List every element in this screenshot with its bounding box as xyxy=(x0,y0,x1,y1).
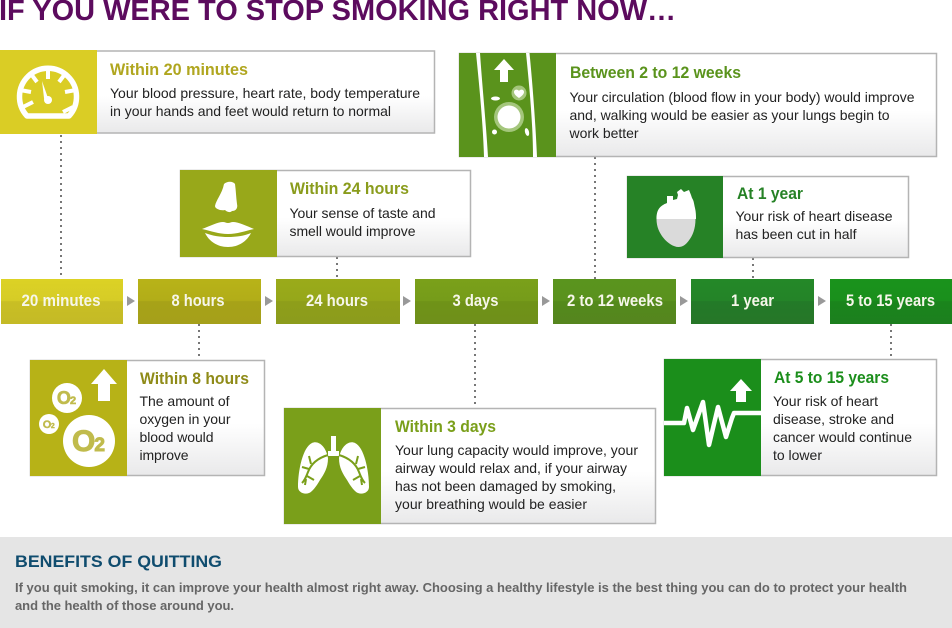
body text: has been cut in half xyxy=(736,226,857,242)
arrow xyxy=(403,296,411,306)
stage: 3 days xyxy=(415,279,538,324)
panel: within 8 hours xyxy=(30,360,264,476)
arrow xyxy=(542,296,550,306)
icon: gauge xyxy=(20,68,76,116)
body text: airway would relax and, if your airway xyxy=(395,460,627,476)
stage: 24 hours: 24 hours xyxy=(306,292,368,310)
stage: 5 to 15 years: 5 to 15 years xyxy=(846,292,935,310)
arrow xyxy=(680,296,688,306)
icon: blood vessel xyxy=(476,53,537,157)
body text: blood would xyxy=(140,429,214,445)
stage: 20 minutes: 20 minutes xyxy=(22,292,100,310)
connector: 20 minutes xyxy=(60,135,62,279)
stage: 20 minutes xyxy=(1,279,123,324)
body text: to lower xyxy=(773,447,822,463)
body text: Your blood pressure, heart rate, body temperature xyxy=(110,85,420,101)
panel: at 1 year xyxy=(627,176,908,258)
icon: oxygen: O2 xyxy=(57,388,76,408)
heading: Within 8 hours xyxy=(140,369,249,388)
body text: disease, stroke and xyxy=(773,411,894,427)
icon: oxygen: O2 xyxy=(72,425,104,458)
body text: Your lung capacity would improve, your xyxy=(395,442,638,458)
body text: smell would improve xyxy=(290,223,416,239)
panel: between 2 to 12 weeks xyxy=(459,53,936,157)
body text: and, walking would be easier as your lungs begin to xyxy=(570,107,890,123)
body text: improve xyxy=(140,447,189,463)
arrow xyxy=(818,296,826,306)
panel: within 24 hours xyxy=(180,170,470,257)
body text: has not been damaged by smoking, xyxy=(395,478,616,494)
timeline: stages xyxy=(1,279,952,324)
body text: Your sense of taste and xyxy=(290,205,436,221)
heading: Within 3 days xyxy=(395,417,496,436)
stage: 1 year: 1 year xyxy=(731,292,775,310)
connector: 1 year xyxy=(752,258,754,279)
icon: oxygen: O2 xyxy=(43,419,55,431)
arrow xyxy=(127,296,135,306)
body text: work better xyxy=(568,125,639,141)
connector: 5 to 15 years xyxy=(890,324,892,359)
stage: 3 days: 3 days xyxy=(452,292,498,310)
icon: nose and lips xyxy=(202,182,254,247)
icon: heartbeat xyxy=(664,379,761,445)
connector: 3 days xyxy=(474,324,476,408)
connector: 8 hours xyxy=(198,324,200,360)
heading: Within 24 hours xyxy=(290,179,409,198)
body text: The amount of xyxy=(140,393,230,409)
body text: oxygen in your xyxy=(140,411,231,427)
body text: Your circulation (blood flow in your body) would improve xyxy=(570,89,915,105)
stage: 1 year xyxy=(691,279,814,324)
heading: Between 2 to 12 weeks xyxy=(570,63,741,82)
body text: your breathing would be easier xyxy=(395,496,587,512)
body text: Your risk of heart disease xyxy=(736,208,893,224)
panel: at 5 to 15 years xyxy=(664,359,936,476)
connector: 24 hours xyxy=(336,257,338,279)
body text: cancer would continue xyxy=(773,429,912,445)
stage: 2 to 12 weeks: 2 to 12 weeks xyxy=(567,292,663,310)
panel: benefits of quitting xyxy=(0,537,952,628)
stage: 5 to 15 years xyxy=(830,279,952,324)
heading: BENEFITS OF QUITTING xyxy=(15,552,222,571)
stage: 24 hours xyxy=(276,279,400,324)
icon: lungs xyxy=(298,436,369,494)
stage: 8 hours: 8 hours xyxy=(172,292,224,310)
panel: within 3 days xyxy=(284,408,656,524)
body text: Your risk of heart xyxy=(773,393,878,409)
stage: 8 hours xyxy=(138,279,261,324)
heading: At 1 year xyxy=(737,184,803,203)
arrow xyxy=(265,296,273,306)
heading: Within 20 minutes xyxy=(110,60,248,79)
heading: At 5 to 15 years xyxy=(774,368,889,387)
stage: 2 to 12 weeks xyxy=(553,279,676,324)
connector: 2 to 12 weeks xyxy=(594,157,596,279)
body text: in your hands and feet would return to normal xyxy=(110,103,391,119)
body text: and the health of those around you. xyxy=(15,598,234,613)
icon: heart xyxy=(656,189,696,247)
icon: oxygen xyxy=(39,369,117,467)
panel: within 20 minutes xyxy=(0,50,434,134)
body text: If you quit smoking, it can improve your health almost right away. Choosing a healthy lifestyle is the best thing you can do to protect your health xyxy=(15,580,907,595)
